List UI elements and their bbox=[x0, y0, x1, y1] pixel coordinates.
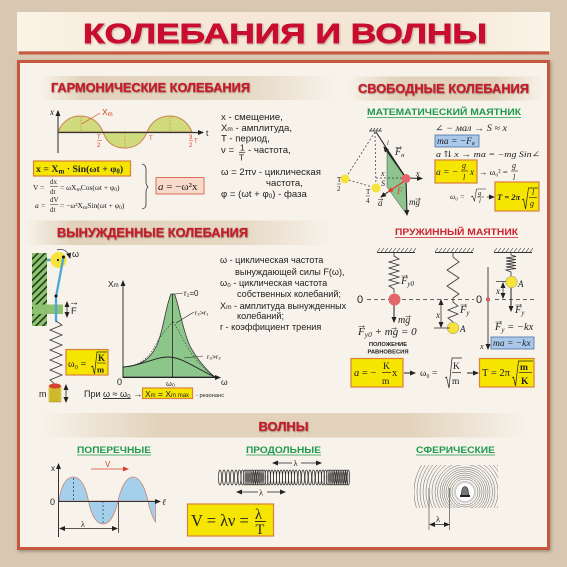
heading: waves bbox=[40, 413, 526, 438]
formula: acceleration: dt bbox=[50, 206, 56, 214]
formula: displacement: · Sin(ωt + φ bbox=[64, 164, 116, 175]
chart: harmonic sine wave: m bbox=[108, 112, 113, 118]
text: forced legend: ω₀ - циклическая частота bbox=[220, 278, 328, 288]
formula row: spring: ω₀ = bbox=[420, 369, 437, 379]
formula: period T: g bbox=[530, 199, 534, 208]
heading: forced: ВЫНУЖДЕННЫЕ КОЛЕБАНИЯ bbox=[57, 226, 248, 240]
formulas: pendulum: l bbox=[479, 198, 481, 205]
diagram: spring pendulum: F bbox=[401, 276, 407, 287]
diagram: spring pendulum: 0 bbox=[357, 294, 363, 306]
formula: a = -g/l x bbox=[435, 160, 477, 183]
diagram: spring pendulum: y bbox=[465, 309, 470, 317]
formulas: pendulum: l bbox=[513, 173, 516, 182]
formula: ma = -Fn: в bbox=[472, 141, 475, 147]
formula: a = -K/m x bbox=[351, 358, 403, 387]
text: definitions: T bbox=[239, 152, 244, 162]
icon: bell bbox=[460, 486, 470, 497]
chart: transverse wave: x bbox=[51, 464, 55, 473]
formula: wave velocity bbox=[188, 504, 274, 538]
formula: velocity: V = bbox=[33, 183, 44, 192]
diagram: spring pendulum: y0 bbox=[406, 280, 415, 288]
chart: harmonic sine wave: t bbox=[206, 128, 209, 138]
subheading: spring pendulum: ПРУЖИННЫЙ МАЯТНИК bbox=[395, 226, 518, 238]
chart: harmonic sine wave: X bbox=[102, 107, 108, 117]
text: definitions: 0 bbox=[269, 193, 273, 200]
title band bbox=[17, 12, 550, 54]
formula: T spring: K bbox=[521, 377, 529, 387]
formula: acceleration: 0 bbox=[119, 205, 122, 211]
diagram: pendulum: T bbox=[366, 188, 371, 196]
formula: ma = -Fn: ma = −F bbox=[437, 137, 472, 147]
formula: velocity: dt bbox=[50, 188, 56, 196]
formula: displacement bbox=[34, 161, 130, 176]
diagram: pendulum: mg bbox=[409, 197, 420, 207]
chart: harmonic sine wave: T bbox=[194, 139, 198, 145]
formula: acceleration: ) bbox=[122, 201, 125, 210]
chart: transverse wave bbox=[50, 460, 166, 537]
diagram: spring pendulum bbox=[357, 248, 534, 356]
text: definitions bbox=[221, 112, 321, 200]
chart: resonance curves: r₂>r₁ bbox=[195, 310, 209, 317]
formulas: pendulum: g bbox=[512, 161, 516, 170]
formula: acceleration: = −ω²X bbox=[60, 201, 83, 210]
subheading: longitudinal: ПРОДОЛЬНЫЕ bbox=[246, 445, 321, 456]
formula: a = -K/m x: a = − bbox=[354, 368, 376, 379]
diagram: longitudinal wave bbox=[218, 458, 350, 498]
formula: velocity: Cos(ωt + φ bbox=[81, 183, 115, 192]
subheading: spherical: СФЕРИЧЕСКИЕ bbox=[416, 445, 495, 456]
formula: acceleration: Sin(ωt + φ bbox=[87, 201, 120, 210]
label: equilibrium position: ПОЛОЖЕНИЕ bbox=[369, 342, 407, 348]
diagram: pendulum: T bbox=[337, 176, 342, 184]
label: equilibrium position bbox=[368, 342, 408, 356]
formula: a = -w2x bbox=[156, 178, 204, 194]
diagram: spring pendulum: = −kx bbox=[505, 322, 534, 333]
subheading: transverse: ПОПЕРЕЧНЫЕ bbox=[77, 445, 151, 456]
diagram: pendulum: S bbox=[381, 179, 385, 188]
formula: a = -w2x: a = −ω²x bbox=[158, 181, 198, 193]
diagram: spring pendulum: F bbox=[495, 322, 501, 333]
formula: velocity: dx bbox=[50, 178, 58, 186]
formulas: pendulum: a ⇅ x → ma = −mg Sin∠ bbox=[436, 149, 540, 159]
diagram: spring pendulum: F bbox=[358, 326, 365, 338]
formula: omega0: m bbox=[97, 364, 104, 374]
formula: acceleration: dV bbox=[50, 196, 59, 204]
formula: a = -K/m x: x bbox=[392, 368, 398, 379]
formula: period T: l bbox=[532, 188, 535, 197]
diagram: longitudinal wave: λ bbox=[259, 488, 264, 498]
chart: transverse wave: 0 bbox=[50, 497, 55, 507]
subheading: mathematical pendulum: МАТЕМАТИЧЕСКИЙ МАЯТНИК bbox=[367, 106, 521, 118]
diagram: spring pendulum: 0 bbox=[476, 294, 482, 306]
text: forced legend bbox=[220, 255, 347, 332]
bracket bbox=[142, 164, 148, 209]
text: definitions: частота, bbox=[266, 178, 303, 189]
diagram: pendulum: н bbox=[401, 152, 404, 159]
chart: harmonic sine wave bbox=[49, 107, 209, 153]
chart: harmonic sine wave: T bbox=[97, 135, 101, 141]
text: definitions: - частота, bbox=[248, 145, 291, 156]
text: definitions: Xm - амплитуда, bbox=[221, 123, 292, 134]
formula: velocity: ) bbox=[117, 183, 120, 192]
formula: ma = -Fn bbox=[435, 135, 479, 147]
diagram: longitudinal wave: λ bbox=[294, 458, 298, 468]
diagram: pendulum: F bbox=[395, 147, 401, 158]
formulas: pendulum: g bbox=[478, 190, 482, 197]
chart: harmonic sine wave: 2 bbox=[189, 143, 193, 149]
chart: harmonic sine wave: T bbox=[149, 136, 153, 142]
formula: velocity: 0 bbox=[114, 187, 117, 193]
formula: period T: T = 2π bbox=[497, 192, 521, 202]
heading: free bbox=[348, 76, 543, 100]
heading: forced bbox=[26, 220, 331, 245]
formula: a = -K/m x: K bbox=[383, 362, 390, 372]
formula row: spring: K bbox=[453, 362, 460, 372]
diagram: spring pendulum: x bbox=[479, 342, 484, 351]
text: forced legend: ω - циклическая частота bbox=[220, 255, 324, 265]
text: definitions: ω = 2πν - циклическая bbox=[221, 167, 321, 178]
formula: a = -g/l x: l bbox=[463, 173, 466, 182]
formulas: pendulum bbox=[435, 123, 540, 211]
diagram: spring pendulum: x bbox=[495, 286, 500, 296]
formulas: pendulum: ∠ − мал → S ≈ x bbox=[435, 123, 507, 133]
heading: waves: ВОЛНЫ bbox=[258, 420, 308, 434]
chart: transverse wave: λ bbox=[81, 520, 85, 529]
chart: harmonic sine wave: 3 bbox=[189, 135, 193, 141]
formula: displacement: 0 bbox=[116, 168, 120, 176]
formula: a = -g/l x: x bbox=[469, 167, 474, 177]
chart: resonance curves: 0 bbox=[117, 377, 122, 387]
diagram: pendulum: x bbox=[380, 169, 385, 178]
chart: harmonic sine wave: x bbox=[49, 107, 54, 117]
formula row: spring bbox=[351, 358, 534, 388]
formula: velocity bbox=[33, 178, 120, 196]
formulas: pendulum: → ω₀² = bbox=[479, 167, 508, 177]
diagram: spring pendulum: + mg = 0 bbox=[372, 326, 417, 338]
icon: mass bbox=[39, 384, 66, 402]
formula: Xm max: Xm = Xm max bbox=[145, 389, 189, 399]
text: definitions: φ = (ωt + φ bbox=[221, 189, 269, 200]
panel: free oscillations bbox=[337, 76, 543, 388]
formula: T spring bbox=[480, 358, 534, 387]
chart: resonance curves: ω₀ bbox=[166, 379, 175, 388]
diagram: pendulum: a bbox=[378, 198, 383, 208]
formula: wave velocity: V = λν = bbox=[191, 511, 249, 530]
formula: omega0: K bbox=[98, 353, 105, 363]
formula: acceleration: m bbox=[83, 205, 88, 211]
icon: mass: m bbox=[39, 389, 46, 399]
chart: harmonic sine wave: 2 bbox=[97, 143, 101, 149]
title: КОЛЕБАНИЯ И ВОЛНЫ bbox=[83, 18, 487, 49]
formula: velocity: = ωX bbox=[60, 183, 76, 192]
diagram: spring pendulum: y bbox=[520, 309, 525, 317]
formula: omega0 bbox=[66, 350, 108, 375]
diagram: pendulum bbox=[337, 128, 422, 215]
chart: transverse wave: ℓ bbox=[162, 497, 166, 507]
diagram: spring pendulum: y bbox=[500, 326, 505, 334]
text: definitions: x - смещение, bbox=[221, 112, 283, 123]
chart: transverse wave: V bbox=[105, 460, 111, 469]
formula: a = -g/l x: a = − bbox=[436, 168, 458, 178]
formula: T spring: m bbox=[520, 363, 528, 373]
panel: harmonic oscillations bbox=[33, 76, 335, 214]
text: resonance condition: - резонанс bbox=[196, 393, 224, 399]
diagram: pendulum: 4 bbox=[366, 197, 370, 205]
text: definitions: ν = bbox=[221, 145, 234, 156]
diagram: spring pendulum: A bbox=[459, 324, 466, 334]
diagram: spring pendulum: x bbox=[435, 310, 440, 320]
diagram: spherical wave: λ bbox=[436, 514, 441, 524]
text: forced legend: r - коэффициент трения bbox=[220, 322, 321, 332]
panel: waves bbox=[50, 413, 506, 537]
formula: displacement: ) bbox=[120, 164, 123, 175]
text: forced legend: собственных колебаний; bbox=[237, 289, 341, 299]
formula row: spring: m bbox=[452, 377, 460, 387]
label: equilibrium position: РАВНОВЕСИЯ bbox=[368, 350, 408, 356]
diagram: pendulum: x bbox=[415, 169, 420, 178]
formula: a = -g/l x: g bbox=[462, 161, 466, 170]
diagram: spring pendulum: y0 bbox=[364, 330, 372, 339]
text: forced legend: Xm - амплитуда вынужденных bbox=[220, 301, 347, 311]
diagram: pendulum: l bbox=[387, 141, 389, 147]
formula: a = -K/m x: m bbox=[382, 377, 390, 387]
formula: period T bbox=[495, 182, 539, 211]
chart: resonance curves: r₃>r₂ bbox=[207, 354, 221, 361]
text: resonance condition: При ω ≈ ω₀ → bbox=[84, 389, 142, 399]
text: definitions: 1 bbox=[240, 142, 245, 152]
diagram: forced oscillator: ω bbox=[72, 249, 79, 259]
panel: forced oscillations bbox=[26, 220, 347, 402]
text: forced legend: вынуждающей силы F(ω), bbox=[235, 267, 345, 277]
heading: harmonic: ГАРМОНИЧЕСКИЕ КОЛЕБАНИЯ bbox=[51, 81, 250, 95]
heading: harmonic bbox=[40, 76, 335, 100]
diagram: spring pendulum: A bbox=[517, 279, 524, 289]
diagram: forced oscillator bbox=[32, 249, 108, 402]
text: definitions: T - период, bbox=[221, 134, 270, 144]
formula: ma = -kx: ma = −kx bbox=[493, 339, 531, 349]
diagram: pendulum: F bbox=[396, 186, 403, 196]
diagram: forced oscillator: F bbox=[71, 306, 77, 317]
formula: acceleration bbox=[35, 196, 125, 214]
diagram: pendulum: 2 bbox=[337, 185, 341, 193]
text: definitions: ) - фаза bbox=[272, 189, 308, 200]
formula: displacement: m bbox=[58, 168, 64, 176]
formula: velocity: m bbox=[76, 187, 81, 193]
chart: resonance curves: r₁=0 bbox=[184, 289, 199, 298]
diagram: spring pendulum: F bbox=[515, 305, 521, 316]
formulas: pendulum: ω₀ = bbox=[450, 192, 465, 201]
formula: wave velocity: λ bbox=[255, 507, 262, 523]
chart: resonance curves bbox=[108, 279, 228, 388]
formula: T spring: T = 2π bbox=[482, 368, 511, 379]
chart: resonance curves: ω bbox=[221, 377, 228, 387]
chart: resonance curves: Xm bbox=[108, 279, 119, 289]
formula: omega0: ω₀ = bbox=[68, 359, 87, 370]
text: forced legend: колебаний; bbox=[237, 311, 284, 321]
diagram: spherical wave bbox=[414, 465, 498, 530]
formula: wave velocity: T bbox=[256, 522, 264, 538]
formula: displacement: x = X bbox=[36, 164, 58, 175]
text: resonance condition bbox=[84, 388, 224, 399]
diagram: spring pendulum: F bbox=[460, 305, 466, 316]
formula: acceleration: a = bbox=[35, 201, 46, 210]
diagram: spring pendulum: mg bbox=[398, 315, 410, 326]
heading: free: СВОБОДНЫЕ КОЛЕБАНИЯ bbox=[358, 82, 529, 96]
